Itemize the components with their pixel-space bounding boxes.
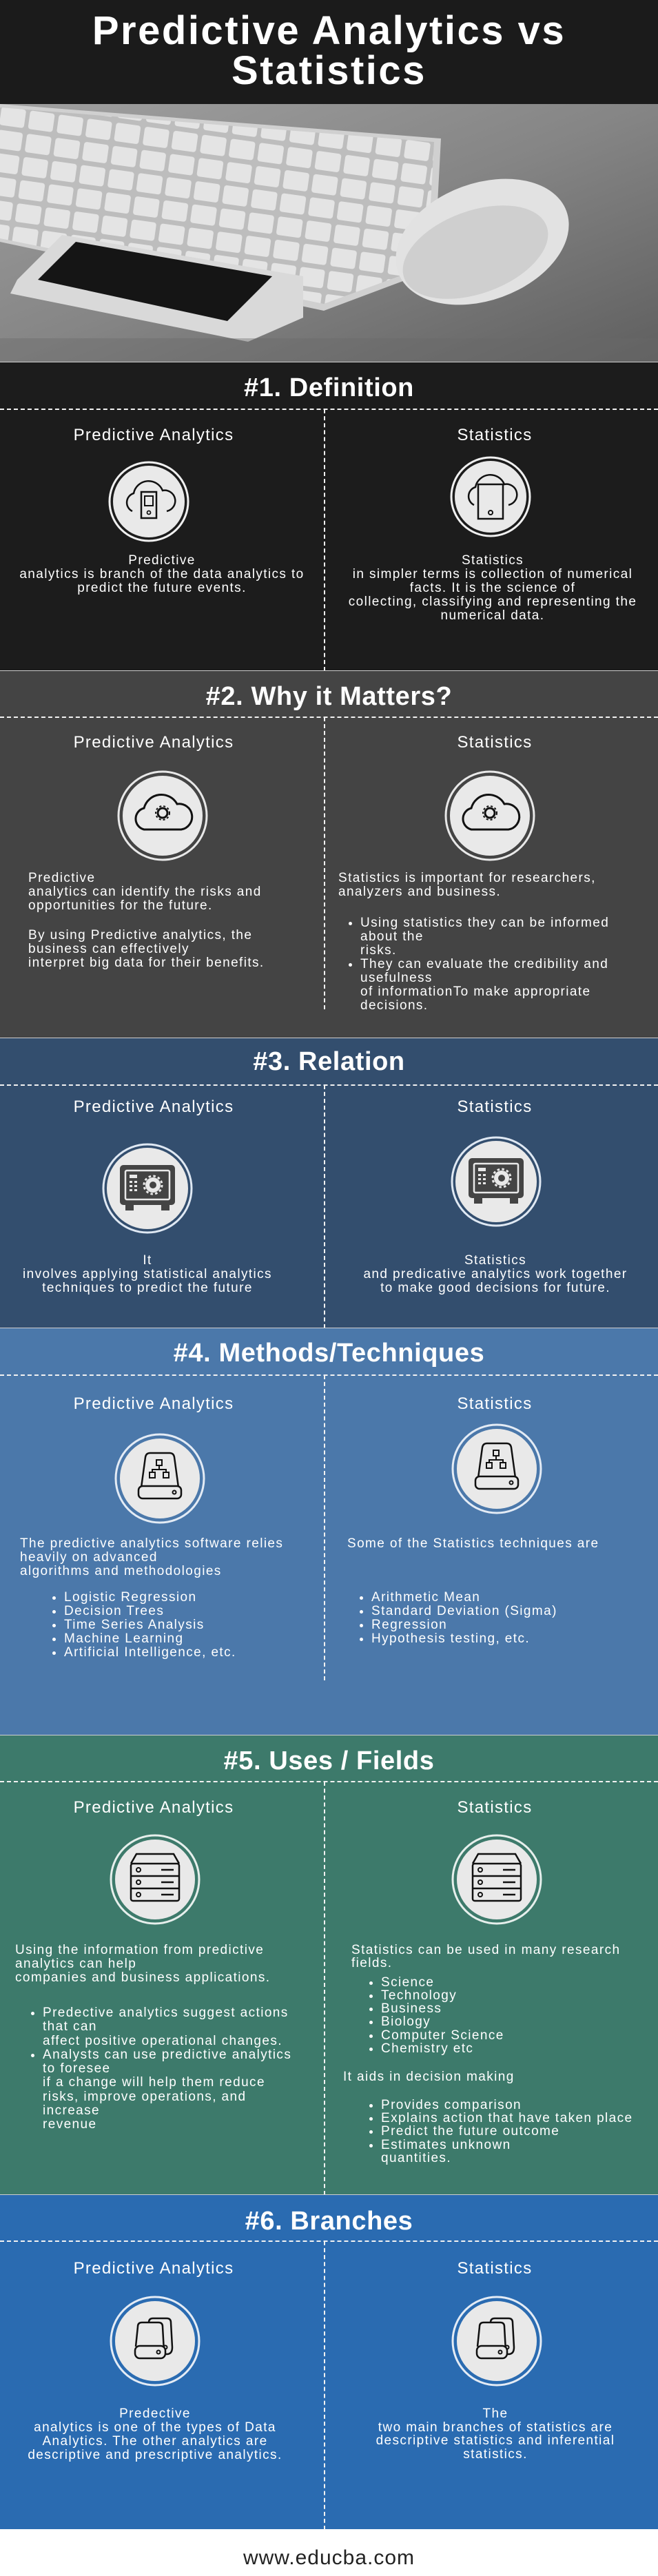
section 2: why it matters	[0, 670, 658, 1038]
text: predictive branches: Analytics. The other analytics are	[42, 2434, 268, 2449]
text: statistics uses: It aids in decision making	[343, 2070, 515, 2084]
text: statistics relation	[363, 1253, 628, 1295]
text: statistics branches: two main branches of statistics are	[378, 2420, 613, 2435]
text: predictive why: business can effectively	[28, 942, 189, 956]
text: predictive why	[28, 871, 265, 970]
title band	[0, 0, 658, 104]
subheading: statistics: Statistics	[457, 2259, 533, 2278]
subheading: statistics: Statistics	[457, 1098, 533, 1116]
icon: server right	[452, 1834, 542, 1925]
text: predictive relation	[23, 1253, 272, 1295]
icon: safe right	[451, 1137, 542, 1226]
text: predictive definition: predict the future events.	[77, 581, 247, 595]
text: predictive methods: Time Series Analysis	[64, 1618, 205, 1632]
text: predictive uses: revenue	[43, 2117, 96, 2132]
heading: relation: #3. Relation	[253, 1047, 405, 1076]
subheading: predictive analytics: Predictive Analytics	[74, 1798, 234, 1817]
text: statistics relation: to make good decisions for future.	[380, 1281, 610, 1295]
title: Statistics	[232, 48, 426, 93]
heading: why it matters: #2. Why it Matters?	[206, 682, 452, 711]
text: statistics branches: statistics.	[463, 2447, 528, 2461]
text: statistics uses: quantities.	[381, 2151, 451, 2165]
text: predictive definition: Predictive	[128, 553, 196, 568]
text: predictive why: analytics can identify the risks and	[28, 885, 262, 899]
text: predictive why: interpret big data for their benefits.	[28, 956, 265, 970]
text: predictive uses: risks, improve operations, and	[43, 2090, 246, 2104]
subheading: predictive analytics: Predictive Analytics	[74, 1394, 234, 1413]
text: statistics branches: The	[483, 2407, 508, 2421]
text: predictive branches	[28, 2407, 282, 2462]
text: statistics why: of informationTo make appropriate	[360, 985, 591, 999]
text: statistics uses: fields.	[351, 1956, 392, 1970]
text: statistics methods	[347, 1536, 599, 1646]
text: statistics relation: and predicative analytics work together	[363, 1267, 628, 1281]
text: statistics definition: numerical data.	[441, 608, 544, 623]
text: statistics uses: Provides comparison	[381, 2098, 522, 2112]
text: predictive definition: analytics is branch of the data analytics to	[19, 567, 305, 581]
photo: keyboard, phone and mouse	[0, 104, 658, 362]
text: predictive methods: algorithms and methodologies	[20, 1564, 222, 1578]
text: statistics methods: Regression	[371, 1618, 447, 1632]
icon: network drive left	[114, 1433, 205, 1524]
text: statistics why: usefulness	[360, 971, 433, 985]
heading: methods/techniques: #4. Methods/Techniques	[174, 1339, 484, 1368]
text: statistics why: risks.	[360, 943, 397, 958]
icon: cloud gear right	[445, 770, 535, 861]
icon: cloud tablet right	[451, 456, 531, 537]
footer: website: www.educba.com	[243, 2546, 415, 2569]
text: predictive branches: Predective	[119, 2407, 191, 2421]
text: predictive uses: to foresee	[43, 2061, 110, 2076]
text: statistics why	[338, 871, 609, 1013]
text: predictive why: Predictive	[28, 871, 95, 885]
text: statistics uses: Computer Science	[381, 2028, 504, 2043]
text: statistics uses: Predict the future outcome	[381, 2124, 559, 2139]
icon: cloud phone left	[109, 462, 189, 542]
text: statistics branches: descriptive statistics and inferential	[376, 2433, 615, 2448]
subheading: statistics: Statistics	[457, 1798, 533, 1817]
section 1: definition	[0, 362, 658, 670]
text: statistics uses: Chemistry etc	[381, 2041, 473, 2056]
text: statistics branches	[376, 2407, 615, 2461]
text: statistics uses	[343, 1943, 633, 2165]
text: statistics definition: collecting, classifying and representing the	[349, 595, 637, 609]
text: statistics definition: Statistics	[462, 553, 524, 568]
text: statistics uses: Estimates unknown	[381, 2138, 511, 2152]
text: predictive uses: affect positive operational changes.	[43, 2034, 282, 2048]
text: predictive relation: involves applying statistical analytics	[23, 1267, 272, 1281]
text: predictive methods: Logistic Regression	[64, 1590, 196, 1605]
text: statistics methods: Standard Deviation (Sigma)	[371, 1604, 557, 1618]
icon: cloud gear left	[117, 770, 208, 861]
icon: safe left	[102, 1144, 193, 1233]
text: statistics why: about the	[360, 929, 424, 944]
text: statistics methods: Some of the Statistics techniques are	[347, 1536, 599, 1551]
text: predictive methods	[20, 1536, 283, 1660]
text: statistics uses: Biology	[381, 2015, 431, 2029]
icon: server left	[110, 1834, 200, 1925]
heading: uses / fields: #5. Uses / Fields	[224, 1746, 434, 1775]
text: statistics definition: in simpler terms is collection of numerical	[353, 567, 633, 581]
text: predictive methods: heavily on advanced	[20, 1550, 158, 1565]
text: predictive methods: The predictive analytics software relies	[20, 1536, 283, 1551]
text: predictive uses: Analysts can use predictive analytics	[43, 2048, 291, 2062]
subheading: statistics: Statistics	[457, 1394, 533, 1413]
text: predictive uses: analytics can help	[15, 1957, 136, 1971]
text: statistics relation: Statistics	[464, 1253, 526, 1268]
title: Predictive Analytics vs	[92, 8, 566, 53]
text: statistics uses: Business	[381, 2001, 442, 2016]
text: statistics uses: Science	[381, 1975, 434, 1990]
subheading: statistics: Statistics	[457, 733, 533, 752]
subheading: statistics: Statistics	[457, 426, 533, 444]
heading: branches: #6. Branches	[245, 2207, 413, 2236]
text: predictive relation: It	[143, 1253, 152, 1268]
text: statistics why: Using statistics they can be informed	[360, 916, 609, 930]
subheading: predictive analytics: Predictive Analytics	[74, 733, 234, 752]
text: predictive branches: descriptive and prescriptive analytics.	[28, 2448, 282, 2462]
text: statistics uses: Technology	[381, 1988, 457, 2003]
icon: network drive right	[452, 1423, 542, 1514]
icon: drives right	[452, 2296, 542, 2387]
icon: drives left	[110, 2296, 200, 2387]
text: predictive uses: if a change will help them reduce	[43, 2075, 265, 2090]
text: statistics why: Statistics is important for researchers,	[338, 871, 596, 885]
heading: definition: #1. Definition	[244, 373, 414, 402]
text: predictive uses	[15, 1943, 291, 2132]
subheading: predictive analytics: Predictive Analytics	[74, 426, 234, 444]
subheading: predictive analytics: Predictive Analytics	[74, 2259, 234, 2278]
text: predictive uses: that can	[43, 2019, 97, 2034]
section 6: branches	[0, 2194, 658, 2529]
section 3: relation	[0, 1038, 658, 1328]
title	[92, 8, 566, 93]
text: predictive uses: increase	[43, 2103, 100, 2118]
text: predictive uses: companies and business applications.	[15, 1970, 270, 1985]
text: statistics why: They can evaluate the credibility and	[360, 957, 608, 971]
text: statistics uses: Explains action that have taken place	[381, 2111, 633, 2125]
section 5: uses / fields	[0, 1735, 658, 2194]
text: predictive branches: analytics is one of the types of Data	[34, 2420, 276, 2435]
text: predictive uses: Using the information from predictive	[15, 1943, 264, 1957]
text: statistics uses: Statistics can be used in many research	[351, 1943, 620, 1957]
text: statistics why: analyzers and business.	[338, 885, 501, 899]
section 4: methods/techniques	[0, 1328, 658, 1735]
text: predictive methods: Machine Learning	[64, 1631, 183, 1646]
text: predictive methods: Artificial Intelligence, etc.	[64, 1645, 236, 1660]
text: statistics methods: Arithmetic Mean	[371, 1590, 480, 1605]
text: statistics definition: facts. It is the science of	[410, 581, 575, 595]
subheading: predictive analytics: Predictive Analytics	[74, 1098, 234, 1116]
text: statistics why: decisions.	[360, 998, 429, 1013]
text: predictive methods: Decision Trees	[64, 1604, 164, 1618]
text: statistics definition	[349, 553, 637, 623]
text: predictive definition	[19, 553, 305, 595]
text: predictive why: opportunities for the future. By using Predictive analytics, the	[28, 898, 252, 942]
text: predictive relation: techniques to predict the future	[42, 1281, 253, 1295]
text: statistics methods: Hypothesis testing, etc.	[371, 1631, 530, 1646]
text: predictive uses: Predective analytics suggest actions	[43, 2006, 289, 2020]
